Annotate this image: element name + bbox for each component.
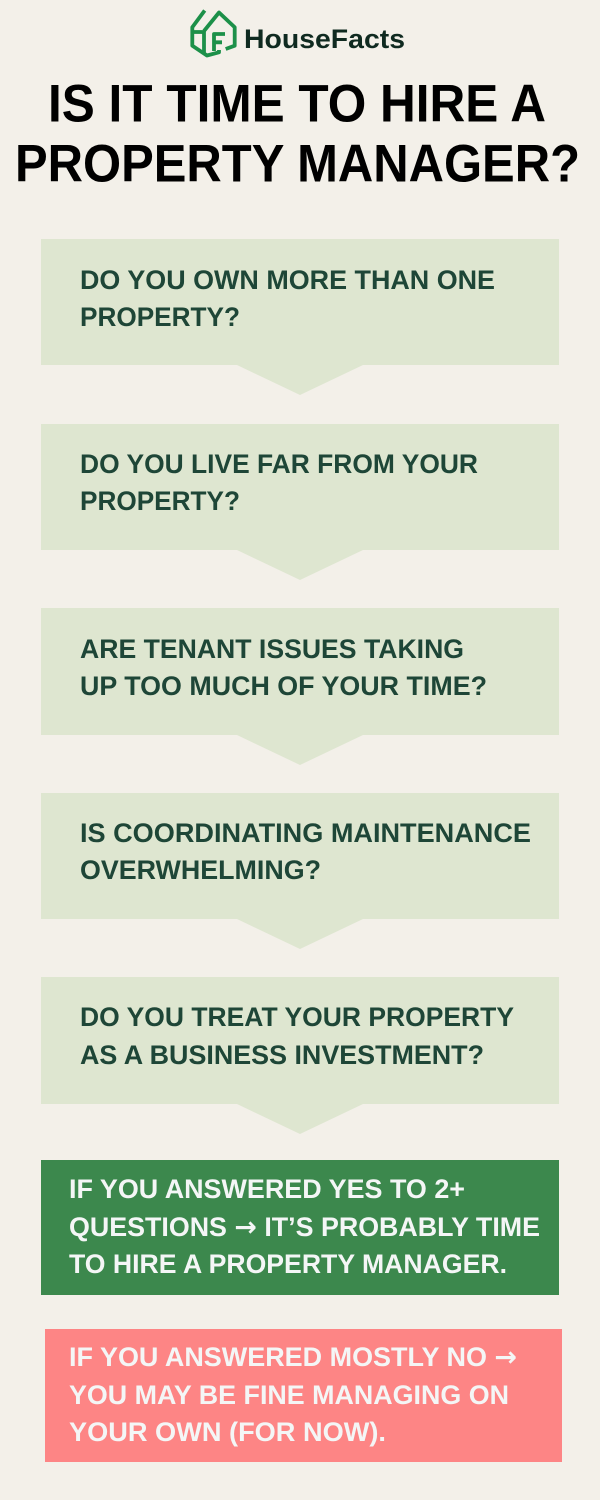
question 2 text: PROPERTY? <box>80 486 240 516</box>
question 4 text <box>80 818 531 885</box>
callout: answered mostly no <box>45 1329 562 1462</box>
arrow: down chevron 2 <box>237 550 363 580</box>
icon: green house with letter F <box>192 10 235 56</box>
question 5 text <box>80 1002 514 1070</box>
question 1 text: PROPERTY? <box>80 302 240 332</box>
question 3 text: UP TOO MUCH OF YOUR TIME? <box>80 671 487 701</box>
question 3 text: ARE TENANT ISSUES TAKING <box>80 634 464 664</box>
yes result text: QUESTIONS → IT’S PROBABLY TIME <box>69 1212 540 1243</box>
title <box>15 75 580 194</box>
callout: answered yes <box>41 1160 559 1295</box>
no result text: IF YOU ANSWERED MOSTLY NO → <box>69 1342 517 1373</box>
question 4 text: IS COORDINATING MAINTENANCE <box>80 818 531 848</box>
yes result text: IF YOU ANSWERED YES TO 2+ <box>69 1174 465 1204</box>
no result text: YOUR OWN (FOR NOW). <box>69 1417 386 1447</box>
question 1 text <box>80 265 495 332</box>
panel: question 4 <box>41 793 559 949</box>
no result text <box>69 1342 517 1447</box>
panel: question 3 <box>41 608 559 765</box>
arrow: down chevron 5 <box>237 1104 363 1134</box>
title: IS IT TIME TO HIRE A <box>48 75 546 134</box>
question 5 text: AS A BUSINESS INVESTMENT? <box>80 1040 484 1070</box>
question 4 text: OVERWHELMING? <box>80 855 321 885</box>
question 5 text: DO YOU TREAT YOUR PROPERTY <box>80 1002 514 1032</box>
panel: question 5 <box>41 977 559 1134</box>
question 3 text <box>80 634 487 701</box>
arrow: down chevron 3 <box>237 735 363 765</box>
question 1 text: DO YOU OWN MORE THAN ONE <box>80 265 495 295</box>
yes result text: TO HIRE A PROPERTY MANAGER. <box>69 1249 507 1279</box>
panel: question 2 <box>41 424 559 580</box>
panel: question 1 <box>41 239 559 395</box>
arrow: down chevron 4 <box>237 919 363 949</box>
arrow: down chevron 1 <box>237 365 363 395</box>
logo wordmark: HouseFacts <box>244 24 405 54</box>
no result text: YOU MAY BE FINE MANAGING ON <box>69 1380 509 1410</box>
logo: HouseFacts <box>192 10 405 56</box>
yes result text <box>69 1174 540 1279</box>
question 2 text <box>80 449 478 516</box>
question 2 text: DO YOU LIVE FAR FROM YOUR <box>80 449 478 479</box>
